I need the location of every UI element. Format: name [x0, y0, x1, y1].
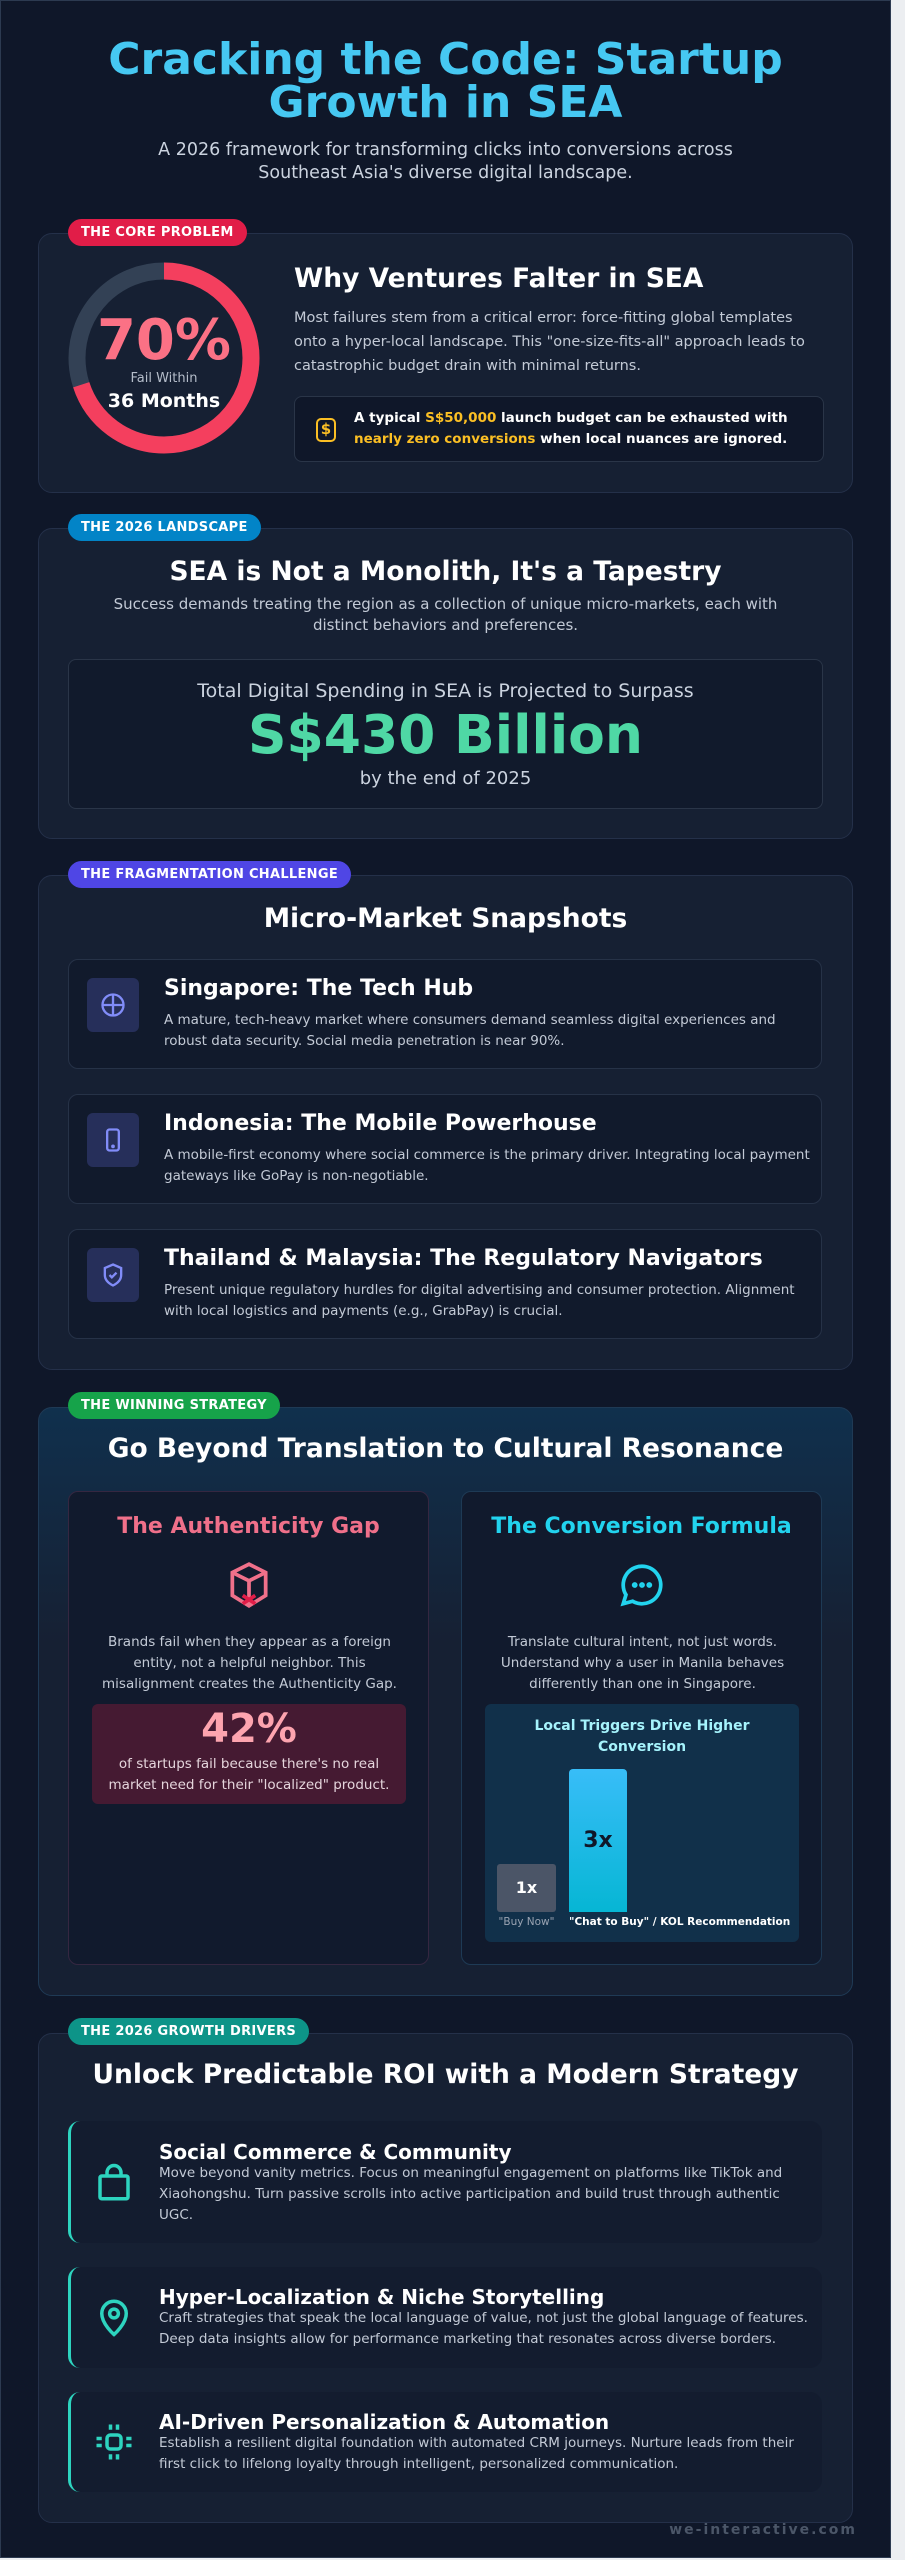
- badge: fragmentation: [68, 861, 351, 888]
- stat box: [68, 659, 823, 809]
- title: Cracking the Code: Startup: [108, 34, 783, 85]
- column: authenticity gap: [68, 1491, 429, 1965]
- callout: [294, 396, 824, 462]
- driver: social commerce: [68, 2121, 822, 2243]
- bar chart: "Chat to Buy" / KOL Recommendation: [569, 1916, 790, 1928]
- column: authenticity gap: Brands fail when they appear as a foreign entity, not a helpful neighbor. This misalignment creates the Authenticity Gap.: [102, 1634, 397, 1692]
- icon: broken box: [230, 1562, 268, 1608]
- stat: 42%: 42%: [201, 1706, 297, 1752]
- title: Growth in SEA: [269, 77, 622, 128]
- heading: cultural resonance: Go Beyond Translation to Cultural Resonance: [108, 1433, 783, 1464]
- stat box: by the end of 2025: [360, 768, 531, 789]
- subtitle: landscape: Success demands treating the region as a collection of unique micro-markets, each with distinct behaviors and preferences.: [114, 595, 777, 634]
- donut chart: Fail Within: [131, 371, 197, 386]
- badge: fragmentation: THE FRAGMENTATION CHALLENGE: [81, 867, 338, 882]
- driver: AI personalization: AI-Driven Personalization & Automation: [159, 2410, 609, 2434]
- badge: landscape: THE 2026 LANDSCAPE: [81, 520, 248, 535]
- panel: winning strategy: [38, 1407, 853, 1996]
- item: indonesia: [68, 1094, 822, 1204]
- subtitle: A 2026 framework for transforming clicks into conversions across: [158, 140, 733, 160]
- icon: globe: [87, 978, 139, 1032]
- bar chart: 3x: [583, 1828, 613, 1853]
- column: conversion formula: Translate cultural intent, not just words. Understand why a user in Manila behaves differently than one in Singapore.: [501, 1634, 784, 1692]
- item: singapore: [68, 959, 822, 1069]
- subtitle: [158, 140, 733, 183]
- column: authenticity gap: The Authenticity Gap: [117, 1514, 380, 1539]
- driver: social commerce: Move beyond vanity metrics. Focus on meaningful engagement on platforms like TikTok and Xiaohongshu. Turn passive scrolls into active participation and build trust through authentic UGC.: [159, 2165, 782, 2223]
- driver: hyper-localization: Craft strategies that speak the local language of value, not just the global language of features. Deep data insights allow for performance marketing that resonates across diverse borders.: [159, 2310, 808, 2347]
- item: thailand malaysia: [68, 1229, 822, 1339]
- icon: dollar: $: [321, 420, 331, 438]
- bar chart: Conversion: [598, 1739, 686, 1755]
- donut chart: 36 Months: [108, 390, 220, 412]
- subtitle: Southeast Asia's diverse digital landscape.: [258, 163, 633, 183]
- footer: we-interactive.com: [669, 2522, 857, 2538]
- icon: shield: [87, 1248, 139, 1302]
- badge: core problem: [68, 219, 247, 246]
- driver: AI personalization: [68, 2392, 822, 2492]
- heading: landscape: SEA is Not a Monolith, It's a Tapestry: [169, 556, 722, 587]
- icon: chip: [96, 2424, 132, 2460]
- panel: core problem: [38, 233, 853, 493]
- donut chart: 70%: [97, 308, 231, 373]
- bar chart: Local Triggers Drive Higher: [534, 1718, 750, 1734]
- bar chart: [485, 1704, 799, 1942]
- stat box: S$430 Billion: [248, 703, 643, 766]
- icon: chat bubble: [620, 1564, 663, 1606]
- stat box: Total Digital Spending in SEA is Projected to Surpass: [197, 680, 694, 702]
- icon: location pin: [100, 2300, 128, 2337]
- badge: growth drivers: [68, 2018, 309, 2045]
- item: singapore: Singapore: The Tech Hub: [164, 976, 473, 1001]
- icon: phone: [87, 1113, 139, 1167]
- item: indonesia: Indonesia: The Mobile Powerhouse: [164, 1111, 597, 1136]
- item: indonesia: A mobile-first economy where social commerce is the primary driver. Integrating local payment gateways like GoPay is non-negotiable.: [164, 1147, 810, 1184]
- stat: 42%: of startups fail because there's no real: [119, 1756, 379, 1772]
- title: [108, 34, 783, 128]
- heading: ROI: Unlock Predictable ROI with a Modern Strategy: [92, 2059, 798, 2090]
- badge: growth drivers: THE 2026 GROWTH DRIVERS: [81, 2024, 296, 2039]
- driver: hyper-localization: [68, 2267, 822, 2368]
- driver: social commerce: Social Commerce & Community: [159, 2140, 512, 2164]
- stat: 42%: market need for their "localized" product.: [109, 1777, 389, 1793]
- driver: hyper-localization: Hyper-Localization & Niche Storytelling: [159, 2285, 604, 2309]
- item: thailand malaysia: Thailand & Malaysia: The Regulatory Navigators: [164, 1246, 763, 1271]
- panel: fragmentation: [38, 875, 853, 1370]
- callout: A typical S$50,000 launch budget can be exhausted with nearly zero conversions when local nuances are ignored.: [354, 410, 788, 447]
- paragraph: Most failures stem from a critical error: force-fitting global templates onto a hyper-local landscape. This "one-size-fits-all" approach leads to catastrophic budget drain with minimal returns.: [294, 310, 805, 374]
- heading: Why Ventures Falter in SEA: [294, 263, 703, 294]
- stat: 42%: [92, 1704, 406, 1804]
- panel: landscape: [38, 528, 853, 839]
- bar chart: 1x: [516, 1878, 537, 1897]
- badge: core problem: THE CORE PROBLEM: [81, 225, 234, 240]
- panel: growth drivers: [38, 2033, 853, 2523]
- icon: dollar: [316, 418, 336, 442]
- column: conversion formula: The Conversion Formula: [491, 1514, 792, 1539]
- donut chart: [68, 262, 260, 454]
- badge: winning strategy: THE WINNING STRATEGY: [81, 1398, 267, 1413]
- item: singapore: A mature, tech-heavy market where consumers demand seamless digital experiences and robust data security. Social media penetration is near 90%.: [164, 1012, 776, 1049]
- column: conversion formula: [461, 1491, 822, 1965]
- driver: AI personalization: Establish a resilient digital foundation with automated CRM journeys. Nurture leads from their first click to lifelong loyalty through intelligent, personalized communication.: [159, 2435, 794, 2472]
- icon: bag: [98, 2164, 130, 2200]
- item: thailand malaysia: Present unique regulatory hurdles for digital advertising and consumer protection. Alignment with local logistics and payments (e.g., GrabPay) is crucial.: [164, 1282, 795, 1319]
- badge: landscape: [68, 514, 261, 541]
- badge: winning strategy: [68, 1392, 280, 1419]
- heading: snapshots: Micro-Market Snapshots: [264, 903, 627, 934]
- bar chart: "Buy Now": [499, 1916, 554, 1928]
